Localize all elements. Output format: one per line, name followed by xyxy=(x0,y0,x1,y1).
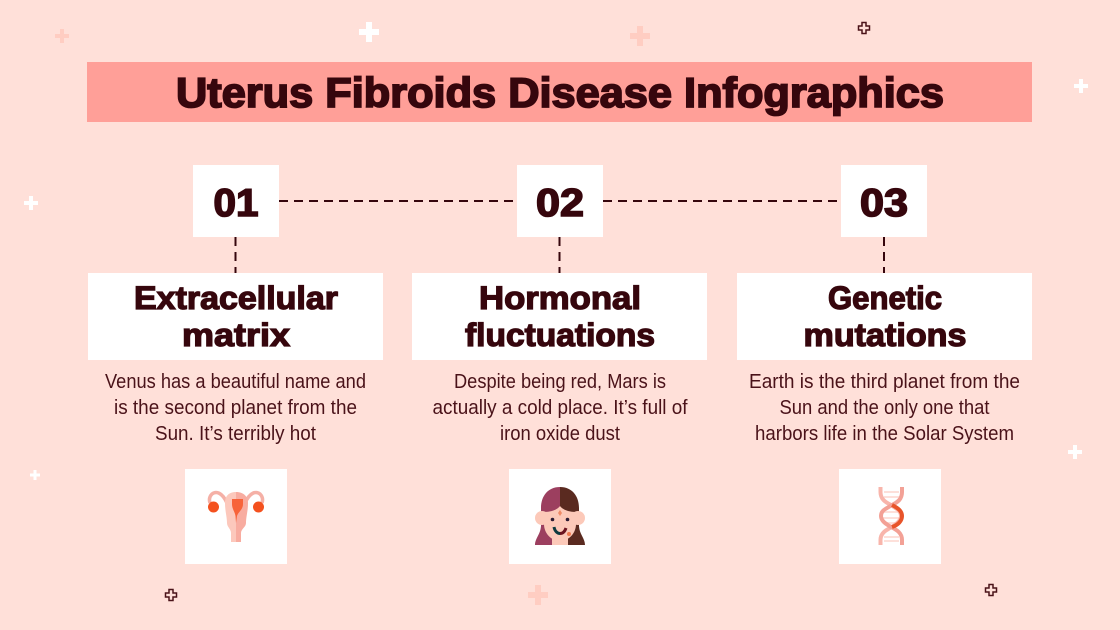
heading: hormonal fluctuations: Hormonal xyxy=(479,280,641,316)
panel: hormonal fluctuations xyxy=(412,165,707,564)
heading: extracellular matrix: matrix xyxy=(182,317,290,353)
text: genetic mutations description xyxy=(749,371,1020,445)
text: hormonal fluctuations description xyxy=(432,371,688,445)
icon: dna helix xyxy=(839,469,941,564)
number 02: 02 xyxy=(536,182,584,225)
heading: genetic mutations: mutations xyxy=(804,317,966,353)
text: genetic mutations description: Earth is the third planet from the xyxy=(749,371,1020,393)
number 03 xyxy=(841,165,927,237)
number 01 xyxy=(193,165,279,237)
heading: genetic mutations: Genetic xyxy=(828,280,942,316)
text: extracellular matrix description xyxy=(105,371,366,445)
panel: extracellular matrix xyxy=(88,165,383,564)
text: genetic mutations description: harbors life in the Solar System xyxy=(755,423,1014,445)
text: genetic mutations description: Sun and the only one that xyxy=(780,397,990,419)
heading: hormonal fluctuations: fluctuations xyxy=(465,317,655,353)
text: hormonal fluctuations description: iron oxide dust xyxy=(500,423,620,445)
heading: hormonal fluctuations xyxy=(412,273,707,360)
title xyxy=(87,62,1032,122)
number 02 xyxy=(517,165,603,237)
text: extracellular matrix description: is the second planet from the xyxy=(114,397,357,419)
icon: woman with acne xyxy=(509,469,611,564)
heading: extracellular matrix: Extracellular xyxy=(134,280,338,316)
text: hormonal fluctuations description: Despite being red, Mars is xyxy=(454,371,666,393)
text: hormonal fluctuations description: actually a cold place. It’s full of xyxy=(432,397,688,419)
number 01: 01 xyxy=(214,182,258,225)
dashed connector: 01 to 03 xyxy=(279,200,841,202)
title: Uterus Fibroids Disease Infographics xyxy=(176,69,944,116)
text: extracellular matrix description: Venus has a beautiful name and xyxy=(105,371,366,393)
text: extracellular matrix description: Sun. It’s terribly hot xyxy=(155,423,316,445)
panel: genetic mutations xyxy=(737,165,1032,564)
heading: extracellular matrix xyxy=(88,273,383,360)
number 03: 03 xyxy=(860,182,908,225)
icon: uterus xyxy=(185,469,287,564)
heading: genetic mutations xyxy=(737,273,1032,360)
